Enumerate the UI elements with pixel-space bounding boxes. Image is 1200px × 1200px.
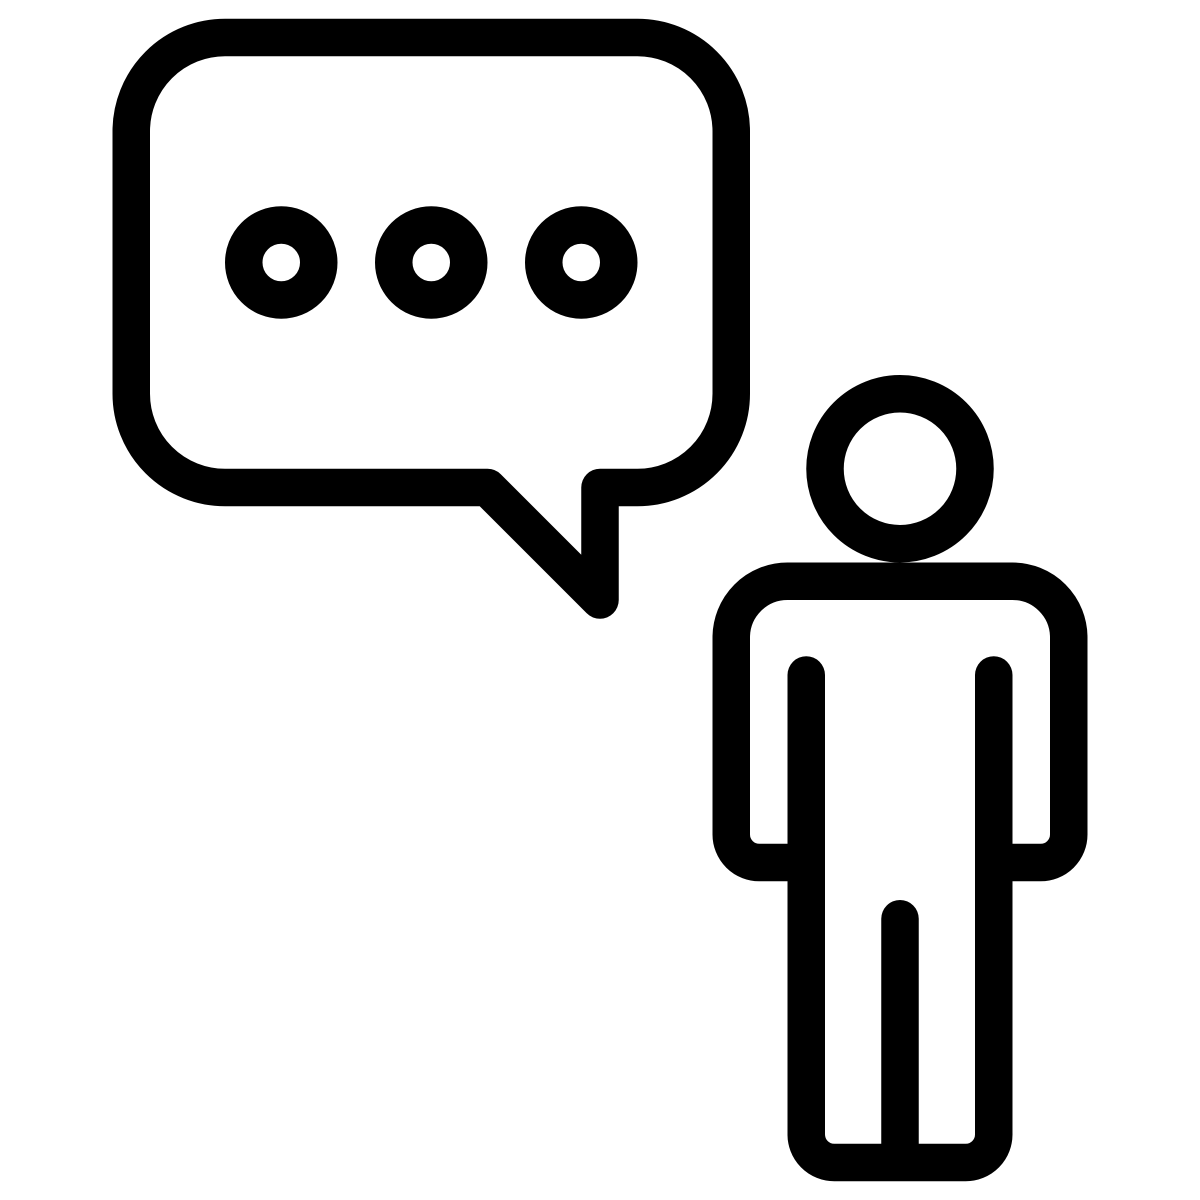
inner leg divider (881, 919, 919, 1158)
icon: speech bubble (131, 38, 731, 600)
typing dot middle (394, 225, 469, 300)
left leg outer line (806, 862, 994, 1162)
typing dot left (244, 225, 319, 300)
speech bubble outline (131, 38, 731, 600)
typing dot right (544, 225, 619, 300)
person head (825, 394, 975, 544)
icon: person (731, 394, 1069, 1162)
person body outline (731, 581, 1069, 863)
